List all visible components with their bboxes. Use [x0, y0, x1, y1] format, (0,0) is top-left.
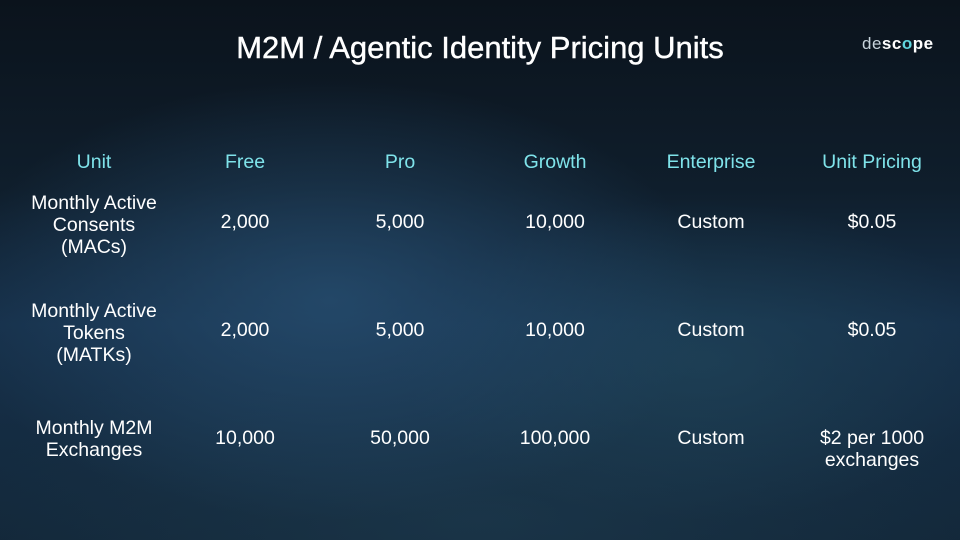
table: exchanges — [825, 449, 919, 471]
row: MATKs — [31, 300, 896, 366]
table: $0.05 — [848, 211, 896, 233]
table: $2 per 1000 — [820, 427, 924, 449]
table: Consents — [53, 214, 135, 236]
logo: descope — [862, 34, 934, 53]
table: 2,000 — [221, 319, 269, 341]
title: M2M / Agentic Identity Pricing Units — [236, 30, 724, 65]
table: Custom — [677, 211, 745, 233]
row: M2M exchanges — [35, 417, 924, 471]
table: Monthly Active — [31, 192, 157, 214]
table: Unit — [77, 151, 111, 173]
table: 5,000 — [376, 211, 424, 233]
table: Growth — [524, 151, 586, 173]
table: (MACs) — [61, 236, 127, 258]
table: Free — [225, 151, 265, 173]
table: 50,000 — [370, 427, 430, 449]
table: 100,000 — [520, 427, 590, 449]
table: Pro — [385, 151, 415, 173]
table: (MATKs) — [56, 344, 132, 366]
table: Unit Pricing — [822, 151, 922, 173]
table: Exchanges — [46, 439, 142, 461]
table: 5,000 — [376, 319, 424, 341]
table: Enterprise — [667, 151, 755, 173]
table — [31, 151, 924, 471]
row: MACs — [31, 192, 896, 258]
table: 10,000 — [525, 211, 585, 233]
table: $0.05 — [848, 319, 896, 341]
table: Custom — [677, 319, 745, 341]
table: Tokens — [63, 322, 125, 344]
header row — [77, 151, 922, 173]
table: 10,000 — [215, 427, 275, 449]
table: Monthly M2M — [35, 417, 153, 439]
table: Monthly Active — [31, 300, 157, 322]
table: 10,000 — [525, 319, 585, 341]
table: Custom — [677, 427, 745, 449]
table: 2,000 — [221, 211, 269, 233]
